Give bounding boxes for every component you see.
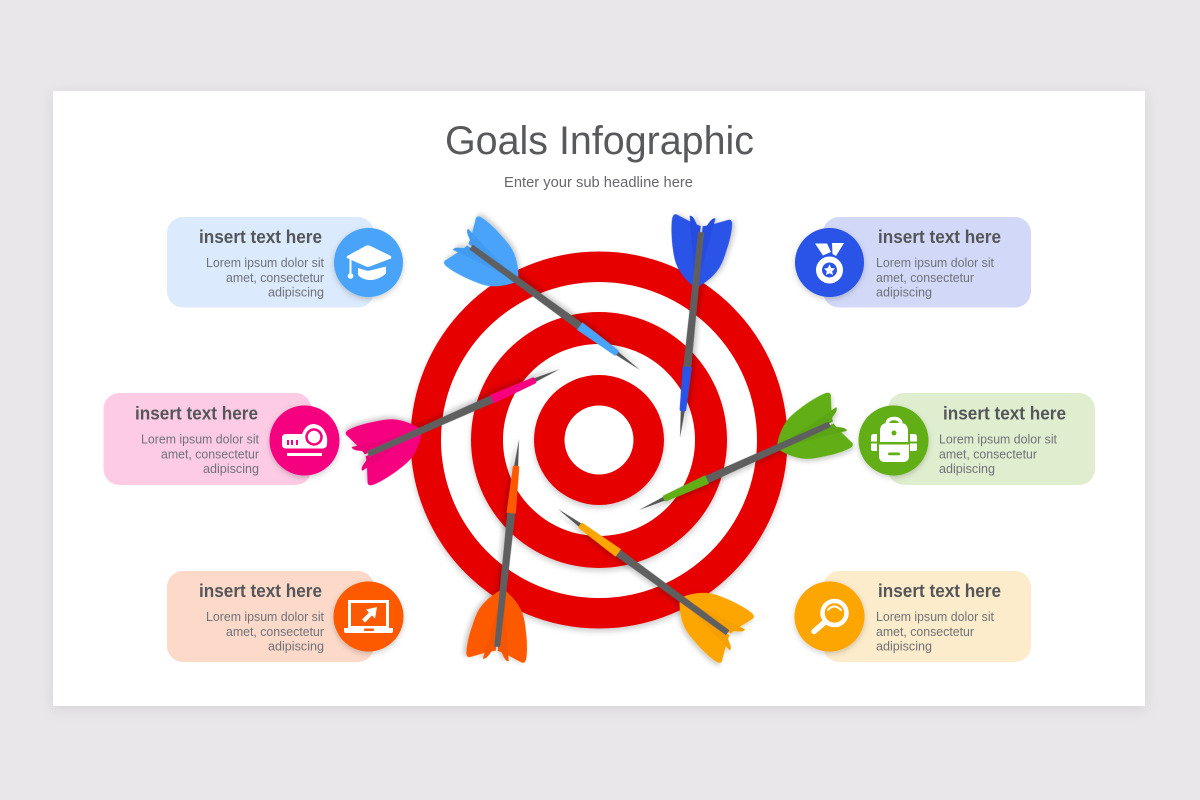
text block: top right: adipiscing [876, 286, 932, 300]
text block: top left [206, 256, 325, 300]
text block: top right: amet, consectetur [876, 271, 974, 285]
text block: top right: Lorem ipsum dolor sit [876, 256, 995, 270]
panel: bottom right card [794, 571, 1031, 662]
text block: top left: Lorem ipsum dolor sit [206, 256, 325, 270]
heading: middle right: insert text here [943, 404, 1066, 424]
heading: top right: insert text here [878, 227, 1001, 247]
text block: bottom left: adipiscing [268, 640, 324, 654]
text block: middle left: amet, consectetur [161, 448, 259, 462]
text block: middle right [939, 432, 1058, 476]
panel: middle left card [104, 393, 340, 485]
heading: bottom right: insert text here [878, 581, 1001, 601]
heading: bottom left: insert text here [199, 581, 322, 601]
subtitle: Enter your sub headline here [504, 175, 693, 191]
panel: top right card [795, 217, 1031, 308]
arrow: yellow dart [540, 485, 755, 664]
panel: bottom left card [167, 571, 404, 662]
panel: top left card [167, 217, 403, 308]
title: Goals Infographic [445, 119, 754, 163]
icon: magnifier [794, 582, 864, 652]
arrow: light blue dart [443, 215, 658, 394]
heading: top left: insert text here [199, 227, 322, 247]
target [410, 252, 788, 628]
text block: middle left: adipiscing [203, 462, 259, 476]
text block: top left: adipiscing [268, 286, 324, 300]
icon: medal [795, 228, 864, 297]
arrow: orange dart [466, 436, 549, 663]
text block: top left: amet, consectetur [226, 271, 324, 285]
text block: bottom right: amet, consectetur [876, 625, 974, 639]
text block: bottom left: Lorem ipsum dolor sit [206, 610, 325, 624]
panel: middle right card [858, 393, 1095, 485]
text block: middle right: adipiscing [939, 462, 995, 476]
icon: graduation cap [334, 228, 403, 297]
arrow: dark blue dart [650, 214, 733, 441]
icon: laptop [334, 582, 404, 652]
arrow: pink dart [345, 341, 572, 487]
text block: bottom left: amet, consectetur [226, 625, 324, 639]
text block: middle left [141, 432, 260, 476]
text block: bottom left [206, 610, 325, 654]
text block: middle right: amet, consectetur [939, 448, 1037, 462]
text block: bottom right [876, 610, 995, 654]
text block: middle left: Lorem ipsum dolor sit [141, 432, 260, 446]
arrow: green dart [627, 391, 854, 538]
text block: bottom right: adipiscing [876, 640, 932, 654]
icon: backpack [858, 406, 928, 476]
icon: projector [270, 406, 340, 476]
slide panel [53, 91, 1145, 706]
text block: middle right: Lorem ipsum dolor sit [939, 432, 1058, 446]
text block: bottom right: Lorem ipsum dolor sit [876, 610, 995, 624]
heading: middle left: insert text here [135, 404, 258, 424]
text block: top right [876, 256, 995, 300]
